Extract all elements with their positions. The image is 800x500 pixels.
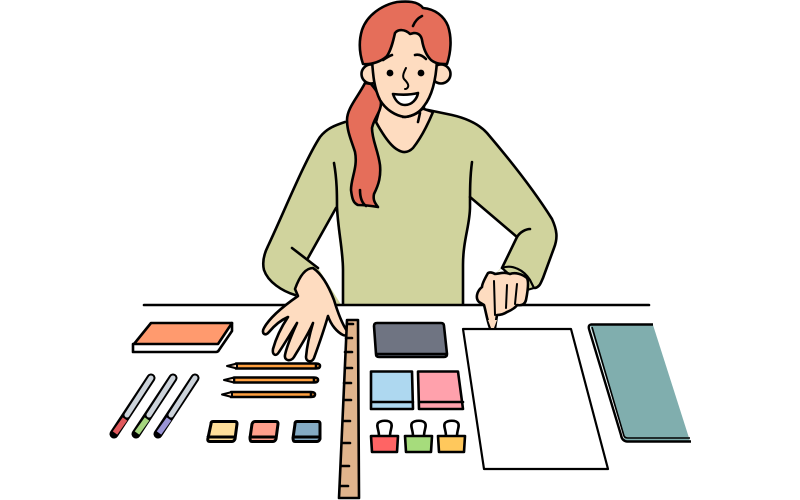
dark grey pad [374,323,447,357]
yellow clip [438,421,465,452]
binder clips [371,421,465,452]
eyes [387,70,424,76]
marker 1 [114,378,151,434]
paper sheet [463,329,608,469]
ponytail strand [360,190,366,206]
pencils [221,364,320,397]
ruler [339,320,359,498]
left hand [263,268,347,361]
teal notebook [589,324,691,442]
blue sticky notes [371,372,413,409]
ponytail [347,83,381,207]
pencil 2 [223,378,318,382]
pencil 3 [221,392,315,397]
pencil 1 [226,364,320,368]
markers [114,378,195,434]
sweater outlines [263,110,556,304]
desk line [144,304,649,306]
woman upper body [263,2,556,306]
marker 3 [158,378,195,434]
blue eraser [293,422,320,442]
green clip [405,421,432,452]
coral eraser [250,422,278,442]
right pointing hand [477,272,528,328]
neck [376,104,433,152]
right hand finger lines [494,281,517,315]
left ear [362,64,380,84]
sweater [263,110,556,305]
hair parting [413,16,422,26]
face [372,28,437,117]
erasers [208,422,320,442]
pink sticky notes [418,372,463,409]
orange book [133,323,232,352]
smile [393,93,418,105]
eyebrows [383,55,426,60]
red clip [371,421,398,452]
right ear [432,64,450,84]
hair [360,2,451,64]
yellow eraser [208,422,237,442]
gaps beside torso [309,199,516,306]
fingertip over paper [488,320,497,328]
neck shadow [403,107,424,122]
right cuff [502,267,534,290]
nose [403,68,408,89]
marker 2 [136,378,173,434]
